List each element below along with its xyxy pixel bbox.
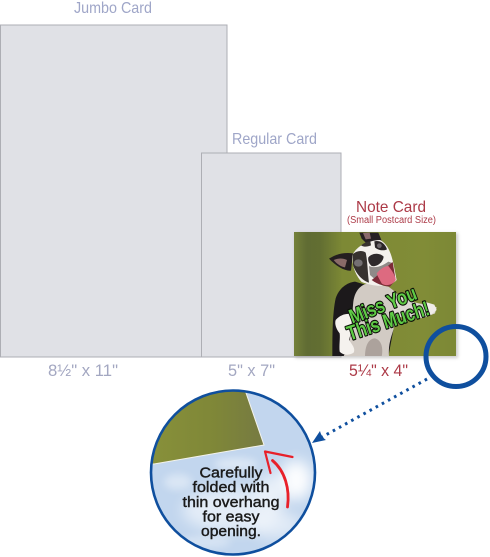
callout text: for easy — [202, 510, 260, 526]
arrow: red curved arrow — [265, 452, 292, 507]
arrow: dotted pointer — [312, 379, 427, 443]
label: Note Card: Note Card — [356, 199, 426, 216]
icon: small highlight ring — [426, 326, 486, 386]
folded card corner — [152, 392, 264, 464]
callout text — [182, 466, 280, 540]
card slogan: Miss You — [346, 282, 420, 329]
label: small postcard size: (Small Postcard Size) — [347, 215, 436, 226]
card slogan — [344, 288, 430, 341]
card slogan: This Much! — [344, 297, 432, 345]
label: jumbo dimensions: 8½" x 11" — [48, 362, 118, 380]
label: Jumbo Card: Jumbo Card — [74, 0, 152, 17]
callout text: Carefully — [200, 466, 263, 482]
callout text: folded with — [192, 480, 270, 496]
panel: regular card — [202, 153, 341, 357]
callout text: thin overhang — [182, 495, 280, 511]
label: Regular Card: Regular Card — [232, 131, 317, 148]
label: regular dimensions: 5" x 7" — [228, 362, 275, 380]
panel: zoomed fold detail — [140, 390, 316, 556]
panel: note card with dog photo — [294, 232, 458, 358]
callout text: opening. — [201, 524, 261, 540]
icon: dog — [329, 233, 437, 357]
label: note card dimensions: 5¼" x 4" — [349, 362, 408, 380]
panel: jumbo card — [0, 25, 227, 357]
